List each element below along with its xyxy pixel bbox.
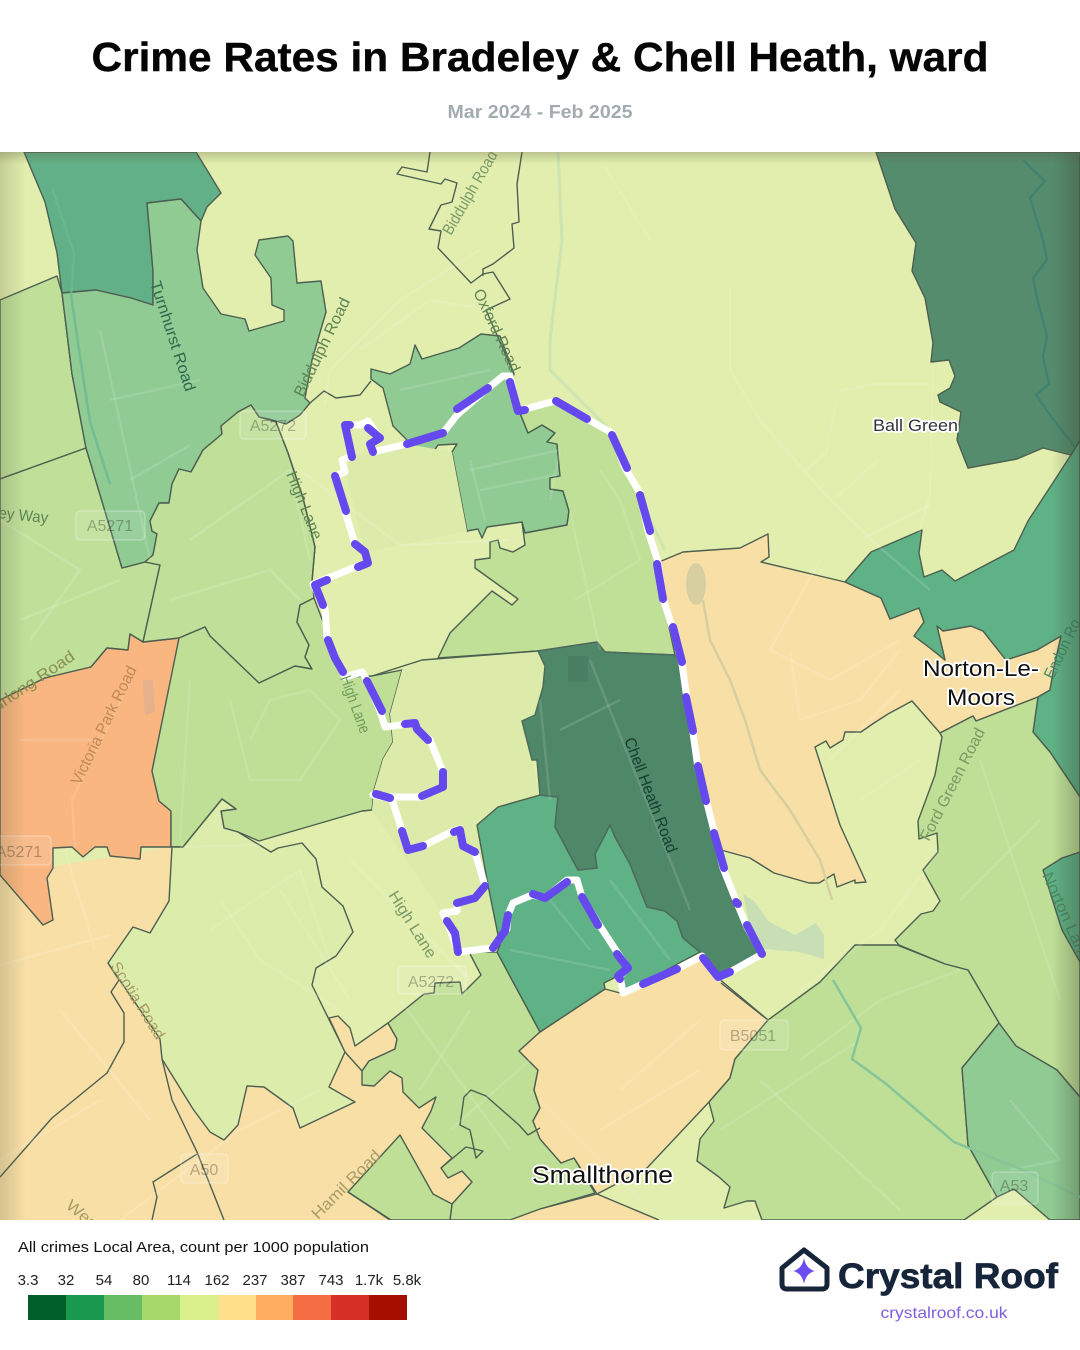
- region: Smallthorne west green: [348, 1135, 452, 1220]
- region: High Lane south light: [320, 1000, 407, 1044]
- legend labels: 3.3: [18, 1272, 38, 1289]
- region: east mid green: [895, 697, 1080, 1097]
- lake and rivers: [52, 152, 1080, 1197]
- road names: Victoria Park Road: [68, 663, 141, 788]
- region: High Lane park green: [152, 598, 402, 847]
- region: Turnhurst medium green: [62, 199, 326, 568]
- legend labels: 162: [204, 1272, 230, 1289]
- region: Chell Heath dark green: [522, 642, 762, 978]
- legend labels: 54: [96, 1272, 112, 1289]
- ward boundary: Bradeley & Chell Heath: [313, 376, 762, 993]
- legend labels: 1.7k: [355, 1272, 384, 1289]
- icon: house with star: [782, 1250, 827, 1289]
- road names: Biddulph Road: [440, 148, 501, 238]
- road names: High Lane: [282, 469, 325, 542]
- region: ward centre light: [372, 651, 545, 952]
- legend labels: 5.8k: [393, 1272, 422, 1289]
- place names: Moors: [947, 685, 1015, 710]
- region: south-east mid green: [697, 945, 999, 1220]
- road names: Ford Green Road: [917, 726, 989, 844]
- region: ward north-west light: [412, 446, 467, 532]
- region: Oxford medium green: [371, 334, 569, 538]
- region: ward east mid green: [438, 401, 675, 658]
- legend labels: [18, 1272, 422, 1289]
- region: Smallthorne west tan wedge: [329, 1016, 397, 1071]
- region: ward south green: [477, 795, 700, 1032]
- region: south-east medium green: [962, 1023, 1080, 1220]
- region: Norton Lane green: [1043, 852, 1080, 962]
- region: north-east dark green: [876, 152, 1080, 468]
- title: Crime Rates in Bradeley & Chell Heath, ward: [92, 34, 988, 80]
- subtitle: date range: Mar 2024 - Feb 2025: [448, 102, 632, 122]
- road names: Oxford Road: [469, 287, 523, 375]
- region: north-east green: [845, 440, 1080, 797]
- road names: West: [62, 1197, 104, 1236]
- road names: Hamil Road: [309, 1147, 384, 1223]
- region: Smallthorne tan: [519, 956, 768, 1194]
- place names: Ball Green: [873, 416, 958, 435]
- logo url: crystalroof.co.uk: [880, 1305, 1009, 1322]
- region: tan east of ward: [659, 534, 1061, 887]
- region: top-left dark green: [24, 152, 221, 305]
- region: west lower green: [0, 448, 160, 700]
- legend title: All crimes Local Area, count per 1000 population: [18, 1239, 369, 1256]
- place names: [532, 416, 1039, 1189]
- streets and paths: [0, 167, 1060, 1220]
- colour scale: [28, 1295, 407, 1320]
- region: Burslem green: [362, 952, 595, 1220]
- road names: High Lane: [385, 888, 439, 962]
- legend labels: 114: [167, 1272, 191, 1289]
- road names: Turnhurst Road: [146, 279, 198, 394]
- road shields: A5272: [408, 974, 454, 991]
- road shields: B5051: [730, 1028, 776, 1045]
- road shields: A50: [190, 1162, 218, 1179]
- road names: Scotia Road: [107, 959, 168, 1043]
- road names: Biddulph Road: [291, 295, 354, 400]
- legend labels: 743: [318, 1272, 344, 1289]
- road shields: [0, 411, 1038, 1204]
- legend labels: 32: [58, 1272, 74, 1289]
- region: south-west light green: [108, 799, 355, 1140]
- place names: Norton-Le-: [923, 656, 1039, 681]
- legend labels: 387: [280, 1272, 306, 1289]
- road shields: A5272: [250, 418, 296, 435]
- legend labels: 237: [242, 1272, 268, 1289]
- road shields: A5271: [87, 518, 133, 535]
- logo: Crystal Roof: [782, 1250, 1058, 1322]
- legend: [18, 1239, 422, 1320]
- road names: Chell Heath Road: [620, 735, 680, 855]
- boundary lines: small-area outlines: [0, 152, 768, 1220]
- road shields: A53: [1000, 1178, 1028, 1195]
- region: west mid green: [0, 276, 86, 479]
- region: A5271 mid green: [143, 405, 315, 683]
- place names: Smallthorne: [532, 1162, 673, 1189]
- logo wordmark: Crystal Roof: [838, 1257, 1058, 1296]
- legend labels: 80: [133, 1272, 149, 1289]
- region: south-west tan: [0, 847, 659, 1220]
- region: Victoria Park orange: [0, 634, 179, 925]
- road names: High Lane: [336, 674, 373, 736]
